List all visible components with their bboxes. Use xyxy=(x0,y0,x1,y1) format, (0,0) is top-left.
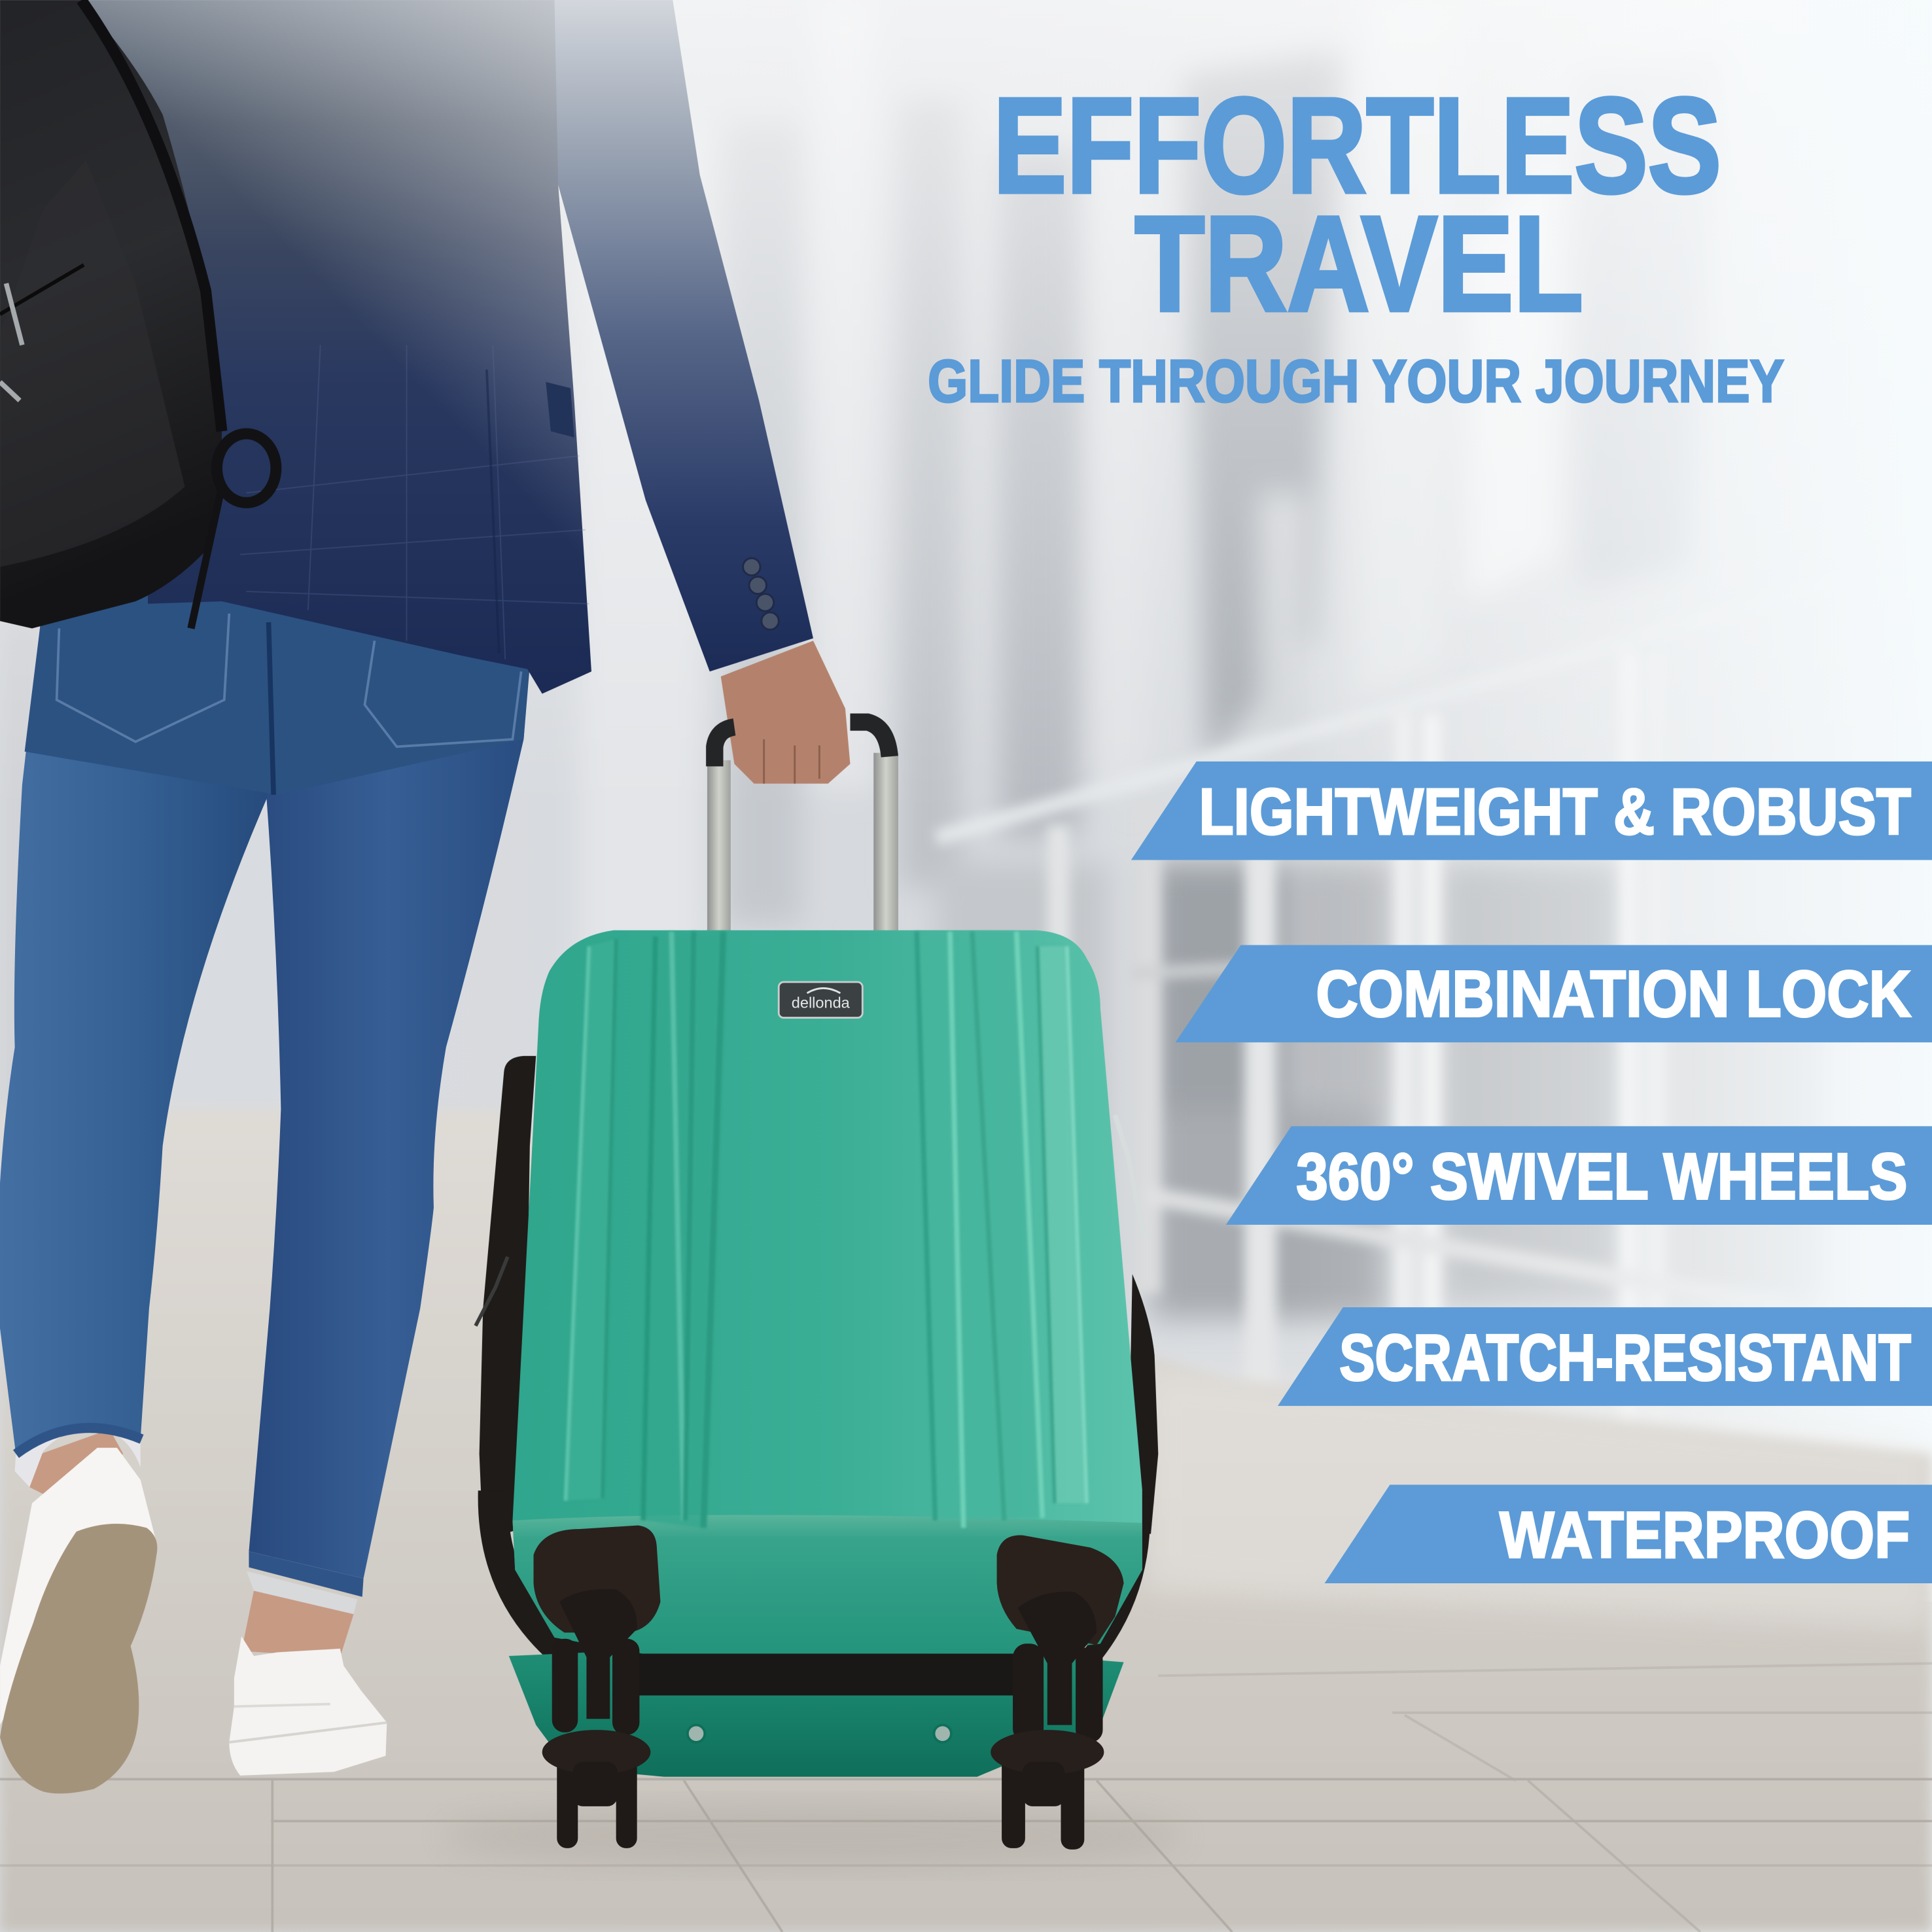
ankle of raised foot xyxy=(29,1430,123,1497)
title line one: EFFORTLESS xyxy=(993,69,1721,221)
suitcase xyxy=(476,722,1158,1850)
shell ridges xyxy=(565,932,1087,1528)
subtitle: GLIDE THROUGH YOUR JOURNEY xyxy=(928,347,1784,415)
zip pull xyxy=(476,1257,508,1326)
right wheels xyxy=(991,1592,1104,1850)
lower shell xyxy=(509,1651,1124,1777)
raised shoe with sole xyxy=(0,1448,157,1793)
front shell band xyxy=(512,1515,1142,1653)
zipper band xyxy=(616,1651,1035,1695)
black side bands xyxy=(480,1056,1158,1678)
brand badge: dellonda xyxy=(792,994,851,1011)
right wheel housing xyxy=(997,1535,1124,1645)
left wheel housing xyxy=(533,1526,660,1632)
jacket sleeve xyxy=(554,0,813,671)
banner: combination lock xyxy=(1176,945,1932,1042)
left wheels xyxy=(542,1589,650,1848)
planted white shoe xyxy=(229,1636,387,1776)
person walking with backpack xyxy=(0,0,850,1793)
right leg of jeans xyxy=(249,616,530,1578)
banner: scratch-resistant xyxy=(1278,1307,1932,1406)
title line two: TRAVEL xyxy=(1135,188,1583,340)
left leg of jeans xyxy=(0,622,296,1455)
ankle of planted foot xyxy=(241,1590,354,1657)
jeans hips and pockets xyxy=(25,579,530,795)
backpack xyxy=(0,0,276,628)
jacket body xyxy=(86,0,616,694)
hand gripping handle xyxy=(721,641,850,784)
upper shell xyxy=(512,930,1142,1653)
telescopic handle xyxy=(707,722,898,932)
brand badge xyxy=(779,982,862,1018)
rivets xyxy=(688,1725,951,1742)
floor with tiles xyxy=(0,1109,1932,1932)
left trouser cuff xyxy=(15,1424,142,1487)
banner: lightweight and robust xyxy=(1131,762,1932,860)
luggage tag xyxy=(1115,1115,1144,1235)
right trouser cuff xyxy=(247,1551,364,1614)
banner: waterproof xyxy=(1325,1484,1932,1583)
title xyxy=(993,69,1721,340)
banner: swivel wheels xyxy=(1226,1126,1932,1225)
